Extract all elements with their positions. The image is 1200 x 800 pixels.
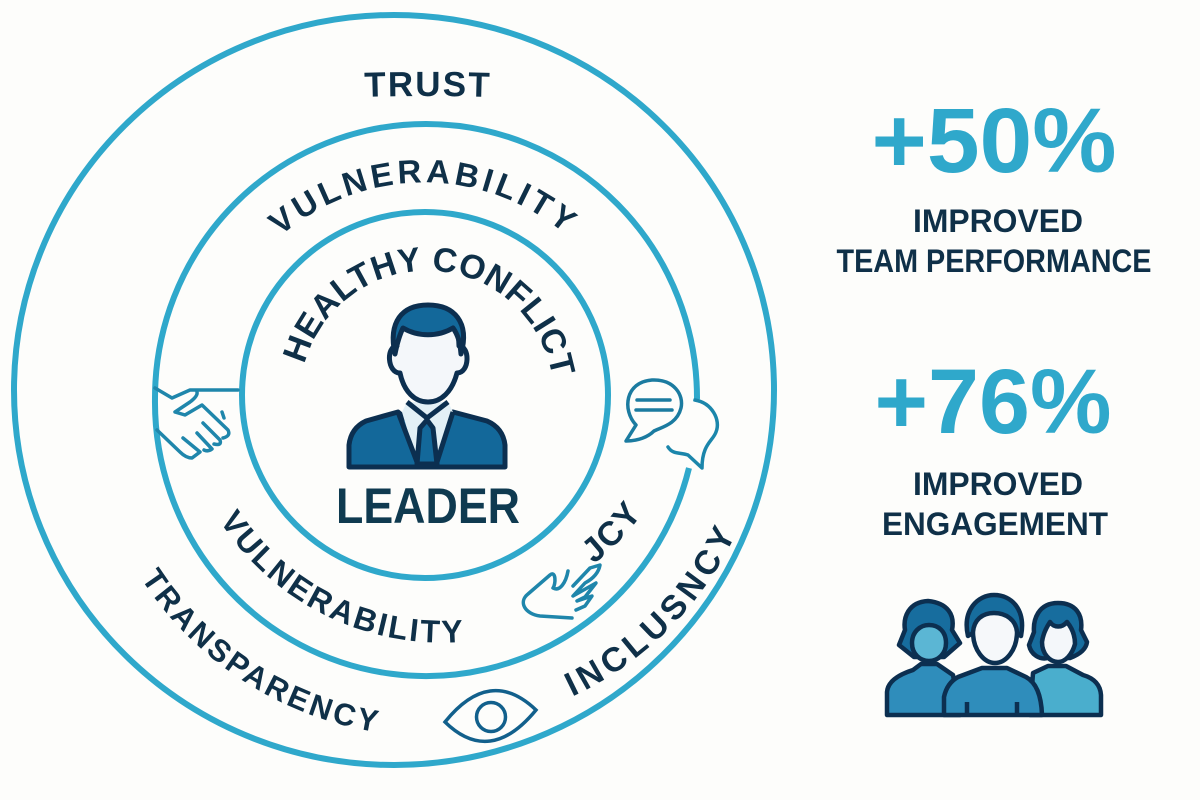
ring label: jcy fragment: JCY xyxy=(584,500,637,562)
icon: leader xyxy=(349,305,505,467)
stat label: improved engagement xyxy=(882,466,1108,542)
icon: pointing hand xyxy=(523,565,600,618)
ring label: healthy conflict: HEALTHY CONFLICT xyxy=(282,247,576,372)
ring label: inclusncy: INCLUSNCY xyxy=(564,524,732,696)
leader label: LEADER xyxy=(336,478,520,534)
icon: team of three xyxy=(887,595,1101,715)
middle ring: vulnerability xyxy=(155,124,697,676)
person left xyxy=(887,601,960,715)
stat: +50%: +50% xyxy=(872,90,1116,192)
icon: speech bubbles xyxy=(626,380,717,468)
concentric rings xyxy=(14,15,774,765)
stat label: improved team performance: TEAM PERFORMANCE xyxy=(836,243,1152,279)
stat label: improved engagement: IMPROVED xyxy=(913,466,1083,502)
stat label: improved engagement: ENGAGEMENT xyxy=(882,506,1108,542)
ring label: trust: TRUST xyxy=(364,72,490,97)
icon: eye xyxy=(445,691,536,741)
stat label: improved team performance: IMPROVED xyxy=(913,203,1083,239)
person center xyxy=(944,595,1042,715)
ring label: vulnerability bottom: VULNERABILITY xyxy=(224,508,462,642)
ring label: vulnerability top: VULNERABILITY xyxy=(266,160,578,231)
person right xyxy=(1029,603,1101,715)
stat label: improved team performance xyxy=(836,203,1152,279)
ring label: transparency: TRANSPARENCY xyxy=(144,566,380,731)
icon: handshake xyxy=(155,388,238,458)
inner ring: healthy conflict xyxy=(242,212,608,578)
outer ring: trust xyxy=(14,15,774,765)
stat: +76%: +76% xyxy=(874,351,1112,453)
